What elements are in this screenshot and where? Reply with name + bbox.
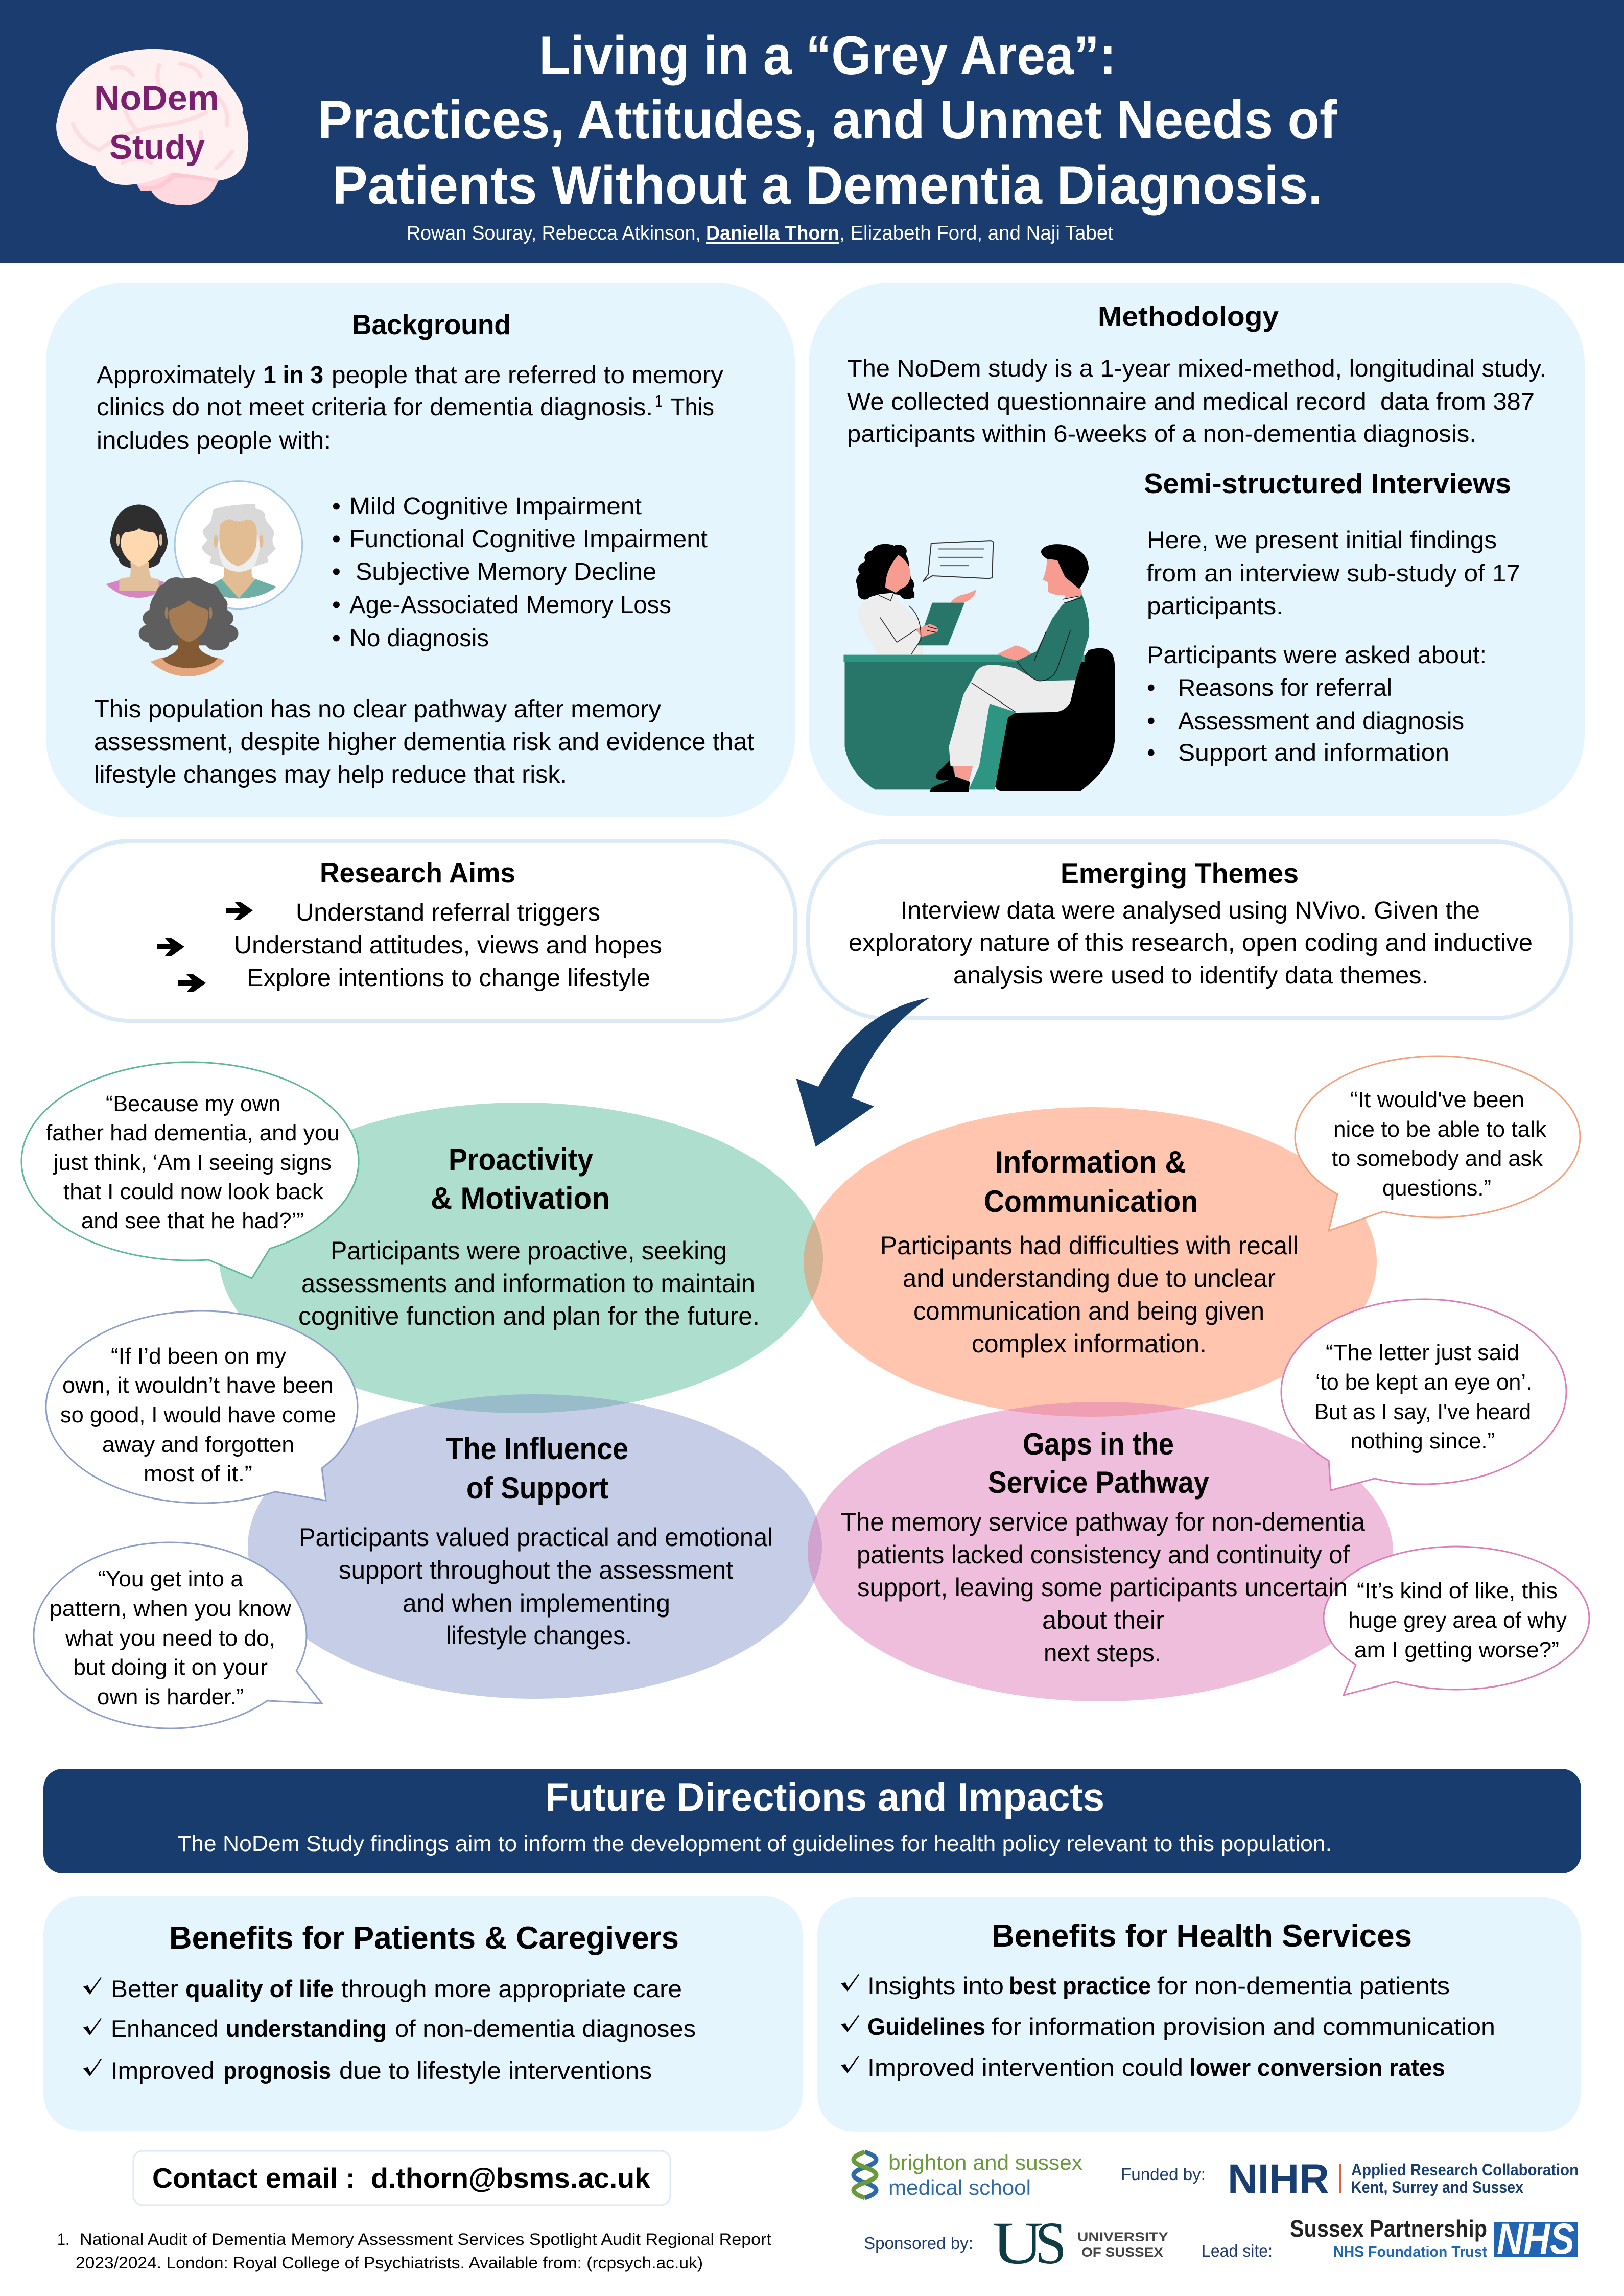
quote bubble: get into a pattern: but doing it on your: [73, 1655, 268, 1680]
logo: university of sussex: OF SUSSEX: [1081, 2245, 1163, 2260]
quote bubble: on my own: “If I’d been on my: [111, 1344, 286, 1369]
logo: NoDem Study brain: Study: [109, 128, 205, 167]
benefit: best practice: for non-dementia patients: [1157, 1972, 1450, 1999]
list: interview topics: [1147, 674, 1464, 766]
theme text: proactivity and motivation: assessments and information to maintain: [301, 1269, 755, 1298]
text block: interview description: Participants were asked about:: [1147, 641, 1487, 668]
text block: emerging themes: exploratory nature of this research, open coding and inductive: [849, 929, 1533, 956]
logo: NIHR ARC: Applied Research Collaboration: [1351, 2161, 1579, 2179]
reference footnote: National Audit of Dementia Memory Assessment Services Spotlight Audit Regional Report: [80, 2230, 771, 2248]
text block: emerging themes: [849, 897, 1533, 989]
quote bubble: nice to talk: to somebody and ask: [1332, 1146, 1543, 1171]
text block: emerging themes: Interview data were analysed using NVivo. Given the: [901, 897, 1480, 924]
quote bubble: huge grey area: am I getting worse?”: [1354, 1637, 1559, 1662]
quote bubble: on my own: away and forgotten: [102, 1432, 294, 1457]
panel: emerging themes: [808, 841, 1571, 1018]
quote bubble: on my own: so good, I would have come: [60, 1402, 336, 1427]
list: diagnosis types: Subjective Memory Decline: [356, 558, 656, 585]
quote bubble: on my own: most of it.”: [144, 1461, 252, 1486]
authors: , Elizabeth Ford, and Naji Tabet: [839, 222, 1113, 244]
heading: benefits for health services: Benefits for Health Services: [992, 1918, 1412, 1954]
theme text: proactivity and motivation: & Motivation: [431, 1181, 610, 1215]
quote bubble: the letter: nothing since.”: [1350, 1428, 1495, 1454]
quote bubble: father had dementia: [21, 1062, 359, 1278]
list: diagnosis types: •: [332, 592, 341, 619]
logo: sussex partnership NHS: Sussex Partnership: [1290, 2215, 1487, 2242]
text block: interview description: participants.: [1147, 592, 1283, 619]
authors: Daniella Thorn: [706, 222, 839, 244]
text block: interview description: from an interview sub-study of 17: [1146, 559, 1520, 587]
list: diagnosis types: •: [332, 558, 341, 585]
logo: brighton and sussex medical school: medical school: [888, 2175, 1031, 2199]
lead site label: Lead site:: [1202, 2241, 1273, 2260]
panel: background: [46, 283, 795, 817]
theme text: gaps in service pathway: Service Pathway: [988, 1465, 1210, 1500]
title: Patients Without a Dementia Diagnosis.: [333, 154, 1323, 216]
text block: future directions: The NoDem Study findings aim to inform the development of guidelines for health policy relevant to this population.: [177, 1832, 1332, 1856]
benefit: understanding: [83, 2015, 696, 2042]
list: interview topics: •: [1147, 707, 1155, 734]
illustration: clinician and patient at desk: [843, 541, 1115, 792]
list: interview topics: Support and information: [1178, 739, 1449, 766]
theme text: proactivity and motivation: Proactivity: [449, 1142, 594, 1177]
aim 3: Explore intentions to change lifestyle: [247, 965, 650, 992]
quote bubble: get into a pattern: pattern, when you know: [50, 1596, 291, 1621]
quote bubble: get into a pattern: [34, 1542, 322, 1728]
logo: brighton and sussex medical school: brighton and sussex: [888, 2150, 1082, 2174]
benefit: guidelines: Guidelines: [867, 2013, 985, 2040]
logo: NIHR ARC: [1228, 2156, 1579, 2203]
quote bubble: huge grey area: [1324, 1547, 1589, 1695]
list: diagnosis types: Functional Cognitive Impairment: [349, 526, 708, 553]
quote bubble: nice to talk: “It would've been: [1350, 1087, 1524, 1112]
theme text: influence of support: and when implementing: [403, 1589, 670, 1618]
title: Living in a “Grey Area”:: [539, 25, 1116, 86]
text block: background intro: [97, 362, 723, 454]
quote bubble: get into a pattern: what you need to do,: [65, 1626, 275, 1651]
theme text: influence of support: [299, 1432, 773, 1650]
theme text: proactivity and motivation: Participants were proactive, seeking: [331, 1236, 727, 1265]
benefit: quality of life: quality of life: [185, 1975, 334, 2002]
logo: university of sussex: [992, 2210, 1168, 2277]
quote bubble: on my own: own, it wouldn’t have been: [62, 1373, 334, 1398]
benefit: understanding: Enhanced: [111, 2015, 218, 2042]
theme text: gaps in service pathway: support, leaving some participants uncertain: [857, 1573, 1348, 1602]
text block: population: [94, 696, 754, 788]
text block: methodology intro: We collected questionnaire and medical record data from 387: [847, 388, 1535, 415]
benefit: conversion rates: lower conversion rates: [1189, 2054, 1445, 2081]
quote bubble: father had dementia: just think, ‘Am I seeing signs: [53, 1150, 332, 1175]
icon: three faceless people: [106, 481, 302, 676]
text block: background intro: includes people with:: [97, 427, 331, 454]
benefit: prognosis: due to lifestyle interventions: [339, 2057, 652, 2084]
benefit: guidelines: for information provision and communication: [992, 2013, 1495, 2040]
text block: interview description: [1146, 526, 1520, 668]
logo: sussex partnership NHS: NHS Foundation Trust: [1333, 2244, 1487, 2260]
heading: emerging themes: Emerging Themes: [1061, 857, 1299, 889]
reference footnote: 1.: [57, 2230, 69, 2248]
reference footnote: 2023/2024. London: Royal College of Psychiatrists. Available from: (rcpsych.ac.uk): [76, 2254, 703, 2272]
theme text: influence of support: support throughout the assessment: [339, 1556, 733, 1584]
quote bubble: father had dementia: “Because my own: [106, 1091, 280, 1116]
logo: NIHR ARC: Kent, Surrey and Sussex: [1351, 2178, 1523, 2196]
panel: benefits for patients and caregivers: [43, 1896, 803, 2131]
benefit: prognosis: [83, 2057, 652, 2084]
benefit: quality of life: through more appropriate care: [341, 1975, 682, 2002]
theme text: proactivity and motivation: cognitive function and plan for the future.: [298, 1302, 760, 1330]
quote bubble: huge grey area: huge grey area of why: [1348, 1608, 1567, 1633]
text block: emerging themes: analysis were used to identify data themes.: [953, 962, 1428, 989]
text block: population: assessment, despite higher dementia risk and evidence that: [94, 729, 754, 756]
theme text: influence of support: of Support: [466, 1471, 608, 1505]
theme text: information and communication: [880, 1145, 1299, 1358]
benefit: best practice: [841, 1972, 1450, 1999]
quote bubble: get into a pattern: own is harder.”: [97, 1684, 244, 1709]
text block: background intro: This: [671, 394, 714, 421]
contact email box: [133, 2151, 670, 2205]
authors: Rowan Souray, Rebecca Atkinson,: [407, 222, 701, 244]
theme text: gaps in service pathway: about their: [1042, 1606, 1164, 1634]
sponsored by label: Sponsored by:: [864, 2234, 973, 2253]
logo: NoDem Study brain: NoDem: [94, 79, 219, 118]
list: diagnosis types: [332, 493, 708, 652]
benefit: understanding: of non-dementia diagnoses: [395, 2015, 696, 2042]
panel: methodology: [809, 283, 1585, 816]
text block: background intro: 1 in 3: [263, 362, 323, 389]
theme text: information and communication: Participants had difficulties with recall: [880, 1231, 1299, 1260]
benefit: best practice: best practice: [1009, 1972, 1151, 1999]
benefit: best practice: Insights into: [867, 1972, 1004, 1999]
benefit: conversion rates: [841, 2054, 1445, 2081]
text block: methodology intro: participants within 6-weeks of a non-dementia diagnosis.: [847, 420, 1476, 447]
quote bubble: father had dementia: and see that he had?’”: [81, 1208, 304, 1233]
text block: population: This population has no clear pathway after memory: [94, 696, 661, 723]
theme text: gaps in service pathway: [841, 1427, 1365, 1667]
theme text: information and communication: Communication: [984, 1184, 1198, 1219]
list: diagnosis types: Mild Cognitive Impairment: [349, 493, 642, 520]
theme ellipse: proactivity and motivation: [219, 1103, 823, 1413]
theme text: information and communication: communication and being given: [913, 1297, 1264, 1325]
logo: NIHR ARC: NIHR: [1228, 2156, 1329, 2203]
theme text: information and communication: complex information.: [972, 1329, 1207, 1358]
theme text: gaps in service pathway: patients lacked consistency and continuity of: [857, 1540, 1350, 1569]
list: interview topics: •: [1147, 674, 1155, 701]
list: interview topics: Assessment and diagnosis: [1178, 707, 1464, 734]
theme text: proactivity and motivation: [298, 1142, 760, 1330]
theme text: influence of support: lifestyle changes.: [446, 1621, 632, 1650]
benefit: quality of life: Better: [111, 1975, 178, 2002]
panel: benefits for health services: [817, 1897, 1581, 2132]
list: diagnosis types: Age-Associated Memory Loss: [349, 592, 671, 619]
logo: sussex partnership NHS: NHS: [1497, 2215, 1574, 2263]
quote bubble: father had dementia: that I could now look back: [63, 1179, 324, 1204]
title: Practices, Attitudes, and Unmet Needs of: [318, 89, 1337, 150]
banner: future directions: [43, 1769, 1581, 1873]
theme text: gaps in service pathway: Gaps in the: [1023, 1427, 1174, 1461]
theme ellipse: gaps in service pathway: [808, 1402, 1393, 1701]
logo: sussex partnership NHS: [1290, 2215, 1578, 2263]
heading: background: Background: [352, 309, 511, 340]
quote bubble: get into a pattern: “You get into a: [98, 1566, 244, 1591]
theme text: influence of support: The Influence: [446, 1432, 628, 1466]
logo: university of sussex: S: [1035, 2210, 1067, 2277]
header banner: [0, 0, 1624, 263]
text block: background intro: people that are referred to memory: [332, 362, 723, 389]
logo: NoDem Study brain: [56, 49, 248, 205]
theme text: information and communication: Information &: [995, 1145, 1186, 1179]
theme text: information and communication: and understanding due to unclear: [903, 1264, 1276, 1293]
quote bubble: the letter: “The letter just said: [1326, 1340, 1519, 1365]
aim 1: Understand referral triggers: [296, 899, 600, 926]
heading: benefits for patients: Benefits for Patients & Caregivers: [169, 1920, 679, 1956]
logo: university of sussex: UNIVERSITY: [1077, 2230, 1168, 2244]
theme ellipse: influence of support: [248, 1394, 822, 1699]
quote bubble: huge grey area: “It’s kind of like, this: [1357, 1578, 1558, 1603]
logo: university of sussex: U: [992, 2210, 1043, 2277]
quote bubble: nice to talk: nice to be able to talk: [1333, 1117, 1547, 1142]
theme text: influence of support: Participants valued practical and emotional: [299, 1523, 773, 1552]
text block: background intro: Approximately: [97, 362, 255, 389]
benefit: conversion rates: Improved intervention could: [867, 2054, 1183, 2081]
quote bubble: father had dementia: father had dementia, and you: [46, 1120, 340, 1145]
theme text: gaps in service pathway: next steps.: [1044, 1638, 1161, 1667]
text block: interview description: Here, we present initial findings: [1147, 526, 1497, 553]
arrow: themes to findings: [796, 998, 930, 1147]
contact email box: Contact email : d.thorn@bsms.ac.uk: [152, 2162, 650, 2194]
text block: methodology intro: The NoDem study is a 1-year mixed-method, longitudinal study.: [847, 355, 1546, 382]
aim 2: Understand attitudes, views and hopes: [234, 932, 662, 959]
text block: background intro: 1: [655, 392, 663, 410]
quote bubble: nice to talk: [1295, 1056, 1580, 1231]
list: diagnosis types: •: [332, 493, 341, 520]
text block: population: lifestyle changes may help reduce that risk.: [94, 761, 567, 788]
quote bubble: the letter: But as I say, I've heard: [1314, 1399, 1531, 1424]
quote bubble: the letter: ‘to be kept an eye on’.: [1315, 1370, 1532, 1395]
reference footnote: [57, 2230, 771, 2272]
theme text: gaps in service pathway: The memory service pathway for non-dementia: [841, 1508, 1365, 1536]
list: diagnosis types: No diagnosis: [349, 625, 489, 652]
benefit: understanding: understanding: [226, 2015, 387, 2042]
heading: future directions: Future Directions and Impacts: [545, 1774, 1104, 1819]
heading: methodology: Methodology: [1098, 300, 1279, 332]
panel: research aims: [53, 841, 795, 1021]
logo: brighton and sussex medical school: [854, 2150, 1082, 2199]
authors: [407, 222, 1113, 244]
list: interview topics: Reasons for referral: [1178, 674, 1392, 701]
title: [318, 25, 1337, 216]
list: interview topics: •: [1147, 739, 1155, 766]
funded by label: Funded by:: [1121, 2165, 1206, 2184]
benefit: quality of life: [83, 1975, 682, 2002]
list: diagnosis types: •: [332, 625, 341, 652]
benefit: prognosis: Improved: [111, 2057, 215, 2084]
heading: semi-structured interviews: Semi-structured Interviews: [1144, 467, 1511, 499]
quote bubble: nice to talk: questions.”: [1382, 1176, 1491, 1201]
text block: background intro: clinics do not meet criteria for dementia diagnosis.: [97, 394, 653, 421]
theme ellipse: information and communication: [804, 1107, 1377, 1417]
quote bubble: on my own: [46, 1311, 358, 1503]
list: diagnosis types: •: [332, 526, 341, 553]
text block: methodology intro: [847, 355, 1546, 447]
quote bubble: the letter: [1281, 1299, 1566, 1490]
heading: research aims: Research Aims: [320, 857, 515, 888]
benefit: prognosis: prognosis: [223, 2057, 331, 2084]
